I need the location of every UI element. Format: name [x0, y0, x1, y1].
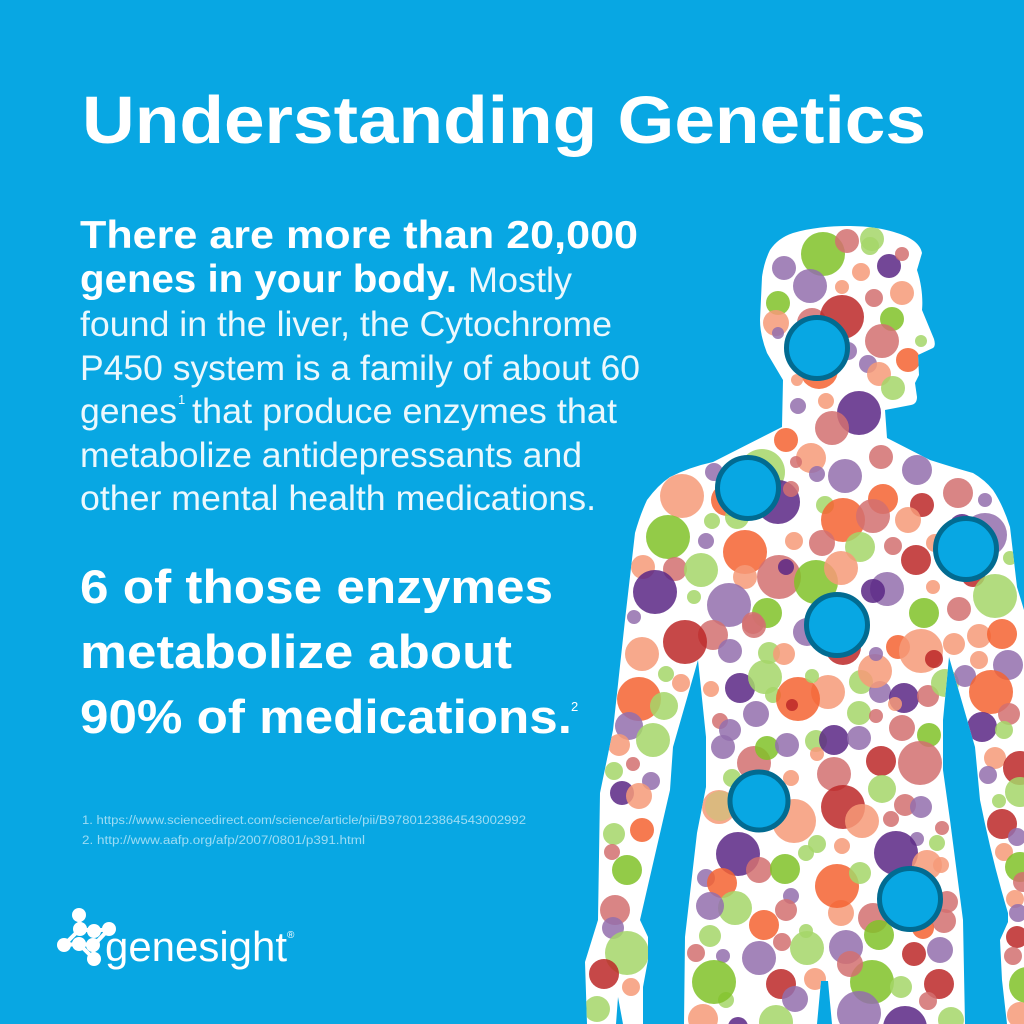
callout: 6 enzymes statistic: 2 — [571, 699, 578, 714]
text block: intro paragraph — [80, 214, 640, 518]
text block: intro paragraph: Mostly — [468, 261, 573, 300]
callout: 6 enzymes statistic — [80, 560, 578, 743]
text block: intro paragraph: 1 — [178, 392, 185, 407]
callout: 6 enzymes statistic: 6 of those enzymes — [80, 560, 553, 613]
footnotes — [82, 815, 526, 847]
text block: intro paragraph: metabolize antidepressants and — [80, 436, 582, 475]
text block: intro paragraph: genes in your body. — [80, 258, 457, 301]
footnotes: 1. https://www.sciencedirect.com/science/article/pii/B9780123864543002992 — [82, 815, 526, 827]
text block: intro paragraph: P450 system is a family of about 60 — [80, 349, 640, 388]
text block: intro paragraph: that produce enzymes that — [192, 392, 617, 431]
text block: intro paragraph: genes — [80, 392, 177, 431]
footnotes: 2. http://www.aafp.org/afp/2007/0801/p391.html — [82, 835, 365, 847]
logo: genesight — [57, 908, 295, 970]
title: Understanding Genetics — [82, 83, 926, 158]
logo: genesight: genesight — [105, 923, 287, 970]
logo: genesight: ® — [287, 930, 295, 941]
text block: intro paragraph: other mental health medications. — [80, 479, 596, 518]
highlighted enzyme rings — [718, 318, 996, 930]
callout: 6 enzymes statistic: metabolize about — [80, 625, 512, 678]
text block: intro paragraph: found in the liver, the Cytochrome — [80, 305, 612, 344]
text block: intro paragraph: There are more than 20,000 — [80, 214, 638, 257]
body circles — [584, 227, 1024, 1024]
human body silhouette — [585, 226, 1024, 1024]
callout: 6 enzymes statistic: 90% of medications. — [80, 690, 572, 743]
